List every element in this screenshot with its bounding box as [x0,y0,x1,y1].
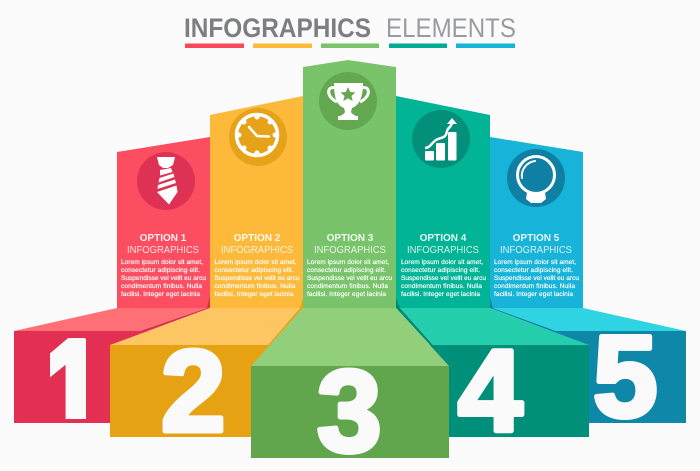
floor 2 [110,308,300,345]
option 2 text: consectetur adipiscing elit. [214,267,294,274]
floor 4 [400,308,589,345]
option 4 text: consectetur adipiscing elit. [401,267,480,274]
option 3 text: Lorem ipsum dolor sit amet, [307,259,389,266]
option 4 text: Lorem ipsum dolor sit amet, [401,259,483,266]
floor 1 fold shadow [140,308,210,331]
floor 3 [251,308,449,366]
option 5 text [494,233,579,298]
option 4 text: facilisi. Integer eget lacinia [401,291,480,298]
floor 5 [493,308,686,331]
option 5 text: condimentum finibus. Nulla [494,283,575,290]
option 3 text: facilisi. Integer eget lacinia [307,291,386,298]
option 2 text: condimentum finibus. Nulla [214,283,296,290]
panel 3 [303,60,396,308]
option 5 text: facilisi. Integer eget lacinia [494,291,573,298]
title colour bars [185,44,515,48]
option 1 text: Lorem ipsum dolor sit amet, [121,259,203,266]
icon: bar chart with arrow [412,110,470,168]
option 4 text: OPTION 4 [420,233,467,244]
option 2 text: Suspendisse vel velit eu arcu [214,275,300,282]
option 1 text: facilisi. Integer eget lacinia [121,291,200,298]
title [184,13,516,43]
floor 1 [14,308,207,331]
box 2 [110,326,280,456]
option 2 text: facilisi. Integer eget lacinia [214,291,294,298]
option 5 text: consectetur adipiscing elit. [494,267,573,274]
option 1 text: Suspendisse vel velit eu arcu [121,275,206,282]
option 4 text: INFOGRAPHICS [407,245,479,256]
floor 2 fold shadow [268,308,303,345]
panel 2 [210,96,303,308]
box 1 [14,331,148,423]
panel 4 [396,96,490,308]
box 3 [251,346,449,471]
panel 1 [117,137,210,308]
option 3 text [307,233,392,298]
icon: light bulb [507,149,565,207]
option 4 text [401,233,486,298]
option 3 text: consectetur adipiscing elit. [307,267,386,274]
icon: clock [229,108,287,166]
option 2 text: OPTION 2 [234,233,281,244]
title: INFOGRAPHICS [184,13,371,43]
option 3 text: INFOGRAPHICS [314,245,386,256]
floor 4 fold shadow [396,308,433,345]
option 5 text: OPTION 5 [513,233,560,244]
number 5: 5 [593,312,658,442]
box 4 [420,326,589,456]
box 5 [546,312,686,442]
title: ELEMENTS [386,13,516,43]
option 1 text [121,233,206,298]
floor 5 fold shadow [490,308,556,331]
option 4 text: Suspendisse vel velit eu arcu [401,275,486,282]
option 2 text: INFOGRAPHICS [221,245,293,256]
option 1 text: consectetur adipiscing elit. [121,267,200,274]
option 2 text [214,233,300,298]
option 4 text: condimentum finibus. Nulla [401,283,482,290]
option 3 text: Suspendisse vel velit eu arcu [307,275,392,282]
icon: trophy [319,72,377,130]
option 1 text: INFOGRAPHICS [127,245,199,256]
option 1 text: condimentum finibus. Nulla [121,283,202,290]
option 3 text: condimentum finibus. Nulla [307,283,388,290]
panel 5 [490,137,583,308]
option 5 text: Suspendisse vel velit eu arcu [494,275,579,282]
option 5 text: Lorem ipsum dolor sit amet, [494,259,576,266]
option 1 text: OPTION 1 [140,233,187,244]
option 2 text: Lorem ipsum dolor sit amet, [214,259,297,266]
number 4: 4 [458,326,523,456]
option 5 text: INFOGRAPHICS [500,245,572,256]
icon: tie [137,152,195,210]
number 2: 2 [161,326,226,456]
option 3 text: OPTION 3 [327,233,374,244]
